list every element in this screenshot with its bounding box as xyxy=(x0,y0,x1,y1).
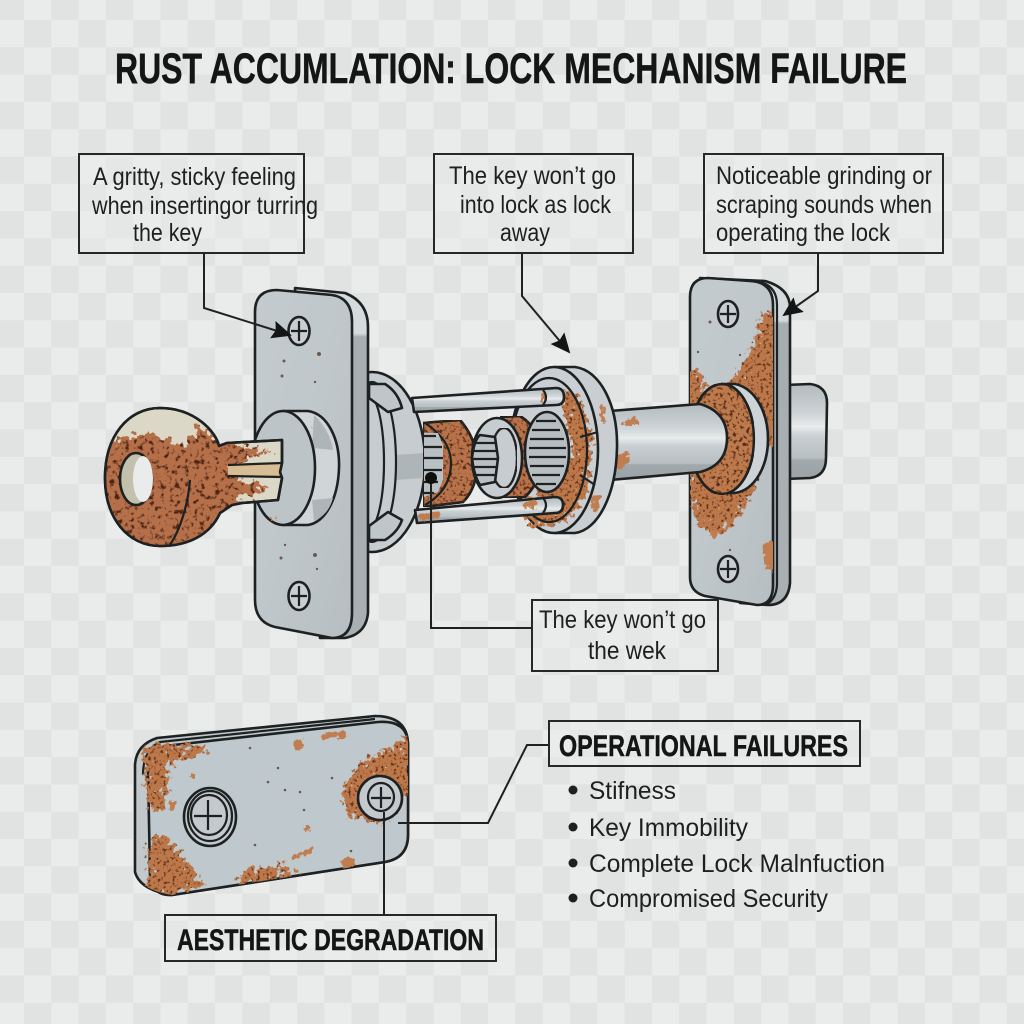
upper rod xyxy=(412,388,564,412)
list: operational failures: Key Immobility xyxy=(589,814,748,842)
callout: grinding sounds: Noticeable grinding or xyxy=(716,162,932,190)
connector: plate to aesthetic degradation xyxy=(383,812,385,915)
arrow: grinding sounds to right plate xyxy=(784,253,818,315)
left flange xyxy=(319,372,425,552)
heading: operational failures: OPERATIONAL FAILURES xyxy=(559,730,848,763)
callout: key won't go: away xyxy=(500,219,550,247)
screw xyxy=(718,556,738,582)
heading: aesthetic degradation xyxy=(165,915,496,961)
callout: gritty feeling: A gritty, sticky feeling xyxy=(93,163,296,191)
left gear xyxy=(424,433,443,497)
arrow: gritty feeling to plate xyxy=(204,253,290,335)
callout: grinding sounds xyxy=(704,154,943,253)
rusted plate detail xyxy=(135,716,414,905)
lower rod xyxy=(415,497,563,523)
ring xyxy=(472,418,522,498)
callout: gritty feeling: when insertingor turring xyxy=(91,192,318,220)
right gear xyxy=(525,412,569,492)
centre gear xyxy=(472,435,498,485)
shaft to right plate xyxy=(610,404,727,480)
screw xyxy=(358,776,402,820)
arrow: key won't go to flange xyxy=(522,253,569,352)
screw xyxy=(288,317,310,345)
list: operational failures: Complete Lock Malnfuction xyxy=(589,850,885,878)
right plate xyxy=(680,278,790,605)
left collar xyxy=(251,411,339,525)
left plate xyxy=(255,288,368,638)
heading: aesthetic degradation: AESTHETIC DEGRADATION xyxy=(177,924,484,957)
bolt end behind right plate xyxy=(785,384,827,479)
rust cylinder left xyxy=(423,420,477,507)
callout: grinding sounds: scraping sounds when xyxy=(716,191,932,219)
screw xyxy=(288,582,310,610)
right flange xyxy=(510,367,617,533)
right collar xyxy=(690,384,768,494)
callout: gritty feeling: the key xyxy=(133,219,202,247)
inner rust cylinders and gears xyxy=(423,412,569,507)
screw xyxy=(718,301,738,327)
callout: grinding sounds: operating the lock xyxy=(716,219,890,247)
callout: key won't go, lower xyxy=(532,600,718,671)
callout: key won't go: into lock as lock xyxy=(460,191,611,219)
list: operational failures: Stifness xyxy=(589,777,676,805)
key xyxy=(100,408,282,555)
callout: key won't go: The key won’t go xyxy=(449,162,616,190)
lock assembly illustration xyxy=(100,278,827,638)
connector: plate to operational failures xyxy=(398,745,549,823)
list: operational failures xyxy=(568,777,885,913)
rust cylinder right xyxy=(500,416,542,498)
callout: key won't go xyxy=(434,154,633,253)
upper window xyxy=(369,384,402,412)
callout: key won't go, lower: the wek xyxy=(588,637,666,665)
lower window xyxy=(369,512,402,540)
screw xyxy=(184,788,236,846)
list: operational failures: Compromised Security xyxy=(589,885,828,913)
heading: operational failures xyxy=(549,721,860,766)
callout: key won't go, lower: The key won’t go xyxy=(539,606,706,634)
key hole xyxy=(120,453,153,505)
connector: lower callout to gear xyxy=(425,472,532,628)
callout: gritty feeling xyxy=(79,154,318,253)
